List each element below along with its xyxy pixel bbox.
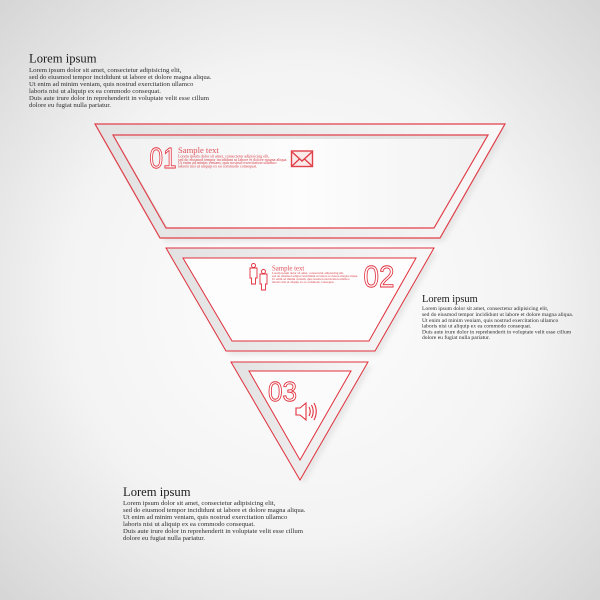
text block: right: sed do eiusmod tempor incididunt ut labore et dolore magna aliqua. [422, 312, 574, 318]
text block: right [422, 294, 574, 341]
text block: right: dolore eu fugiat nulla pariatur. [422, 334, 490, 341]
text block: right: laboris nisi ut aliquip ex ea commodo consequat. [422, 324, 532, 330]
text block: top left [29, 52, 212, 109]
icon: people [250, 264, 267, 290]
sample text 02: Ut enim ad minim veniam, quis nostrud exercitation ullamco [272, 277, 350, 282]
sample text 02 [272, 266, 358, 284]
text block: bottom: Lorem ipsum dolor sit amet, consectetur adipisicing elit, [123, 500, 276, 507]
number 03: 03 [268, 376, 297, 407]
text block: right: Ut enim ad minim veniam, quis nostrud exercitation ullamco [422, 318, 558, 324]
text block: bottom: Lorem ipsum [123, 485, 191, 499]
text block: top left: Lorem ipsum dolor sit amet, consectetur adipisicing elit, [29, 67, 182, 74]
text block: bottom: Ut enim ad minim veniam, quis nostrud exercitation ullamco [123, 514, 288, 521]
text block: right: Duis aute irure dolor in reprehenderit in voluptate velit esse cillum [422, 329, 572, 335]
number 01: 01 [150, 143, 176, 175]
text block: bottom: laboris nisi ut aliquip ex ea commodo consequat. [123, 521, 255, 528]
text block: top left: Lorem ipsum [29, 52, 97, 66]
sample text 02: Lorem ipsum dolor sit amet, consectetur adipisicing elit, [272, 271, 344, 276]
sample text 02: Sample text [272, 266, 304, 272]
sample text 01: Sample text [178, 145, 219, 155]
text block: bottom: dolore eu fugiat nulla pariatur. [123, 535, 205, 542]
panel: triangle 03 [231, 362, 372, 484]
sample text 01: laboris nisi ut aliquip ex ea commodo consequat. [178, 163, 257, 168]
sample text 01: sed do eiusmod tempor incididunt ut labore et dolore magna aliqua. [178, 157, 287, 162]
text block: top left: Duis aute irure dolor in reprehenderit in voluptate velit esse cillum [29, 95, 210, 102]
icon: envelope [292, 151, 312, 166]
text block: bottom: Duis aute irure dolor in reprehenderit in voluptate velit esse cillum [123, 528, 304, 535]
text block: top left: sed do eiusmod tempor incididunt ut labore et dolore magna aliqua. [29, 74, 212, 81]
text block: top left: Ut enim ad minim veniam, quis nostrud exercitation ullamco [29, 81, 194, 88]
sample text 01 [178, 145, 287, 168]
text block: bottom [123, 485, 306, 542]
number 02: 02 [364, 259, 394, 294]
text block: top left: dolore eu fugiat nulla pariatur. [29, 102, 111, 109]
text block: right: Lorem ipsum dolor sit amet, consectetur adipisicing elit, [422, 306, 549, 312]
icon: speaker [296, 403, 316, 420]
text block: bottom: sed do eiusmod tempor incididunt ut labore et dolore magna aliqua. [123, 507, 306, 514]
text block: top left: laboris nisi ut aliquip ex ea commodo consequat. [29, 88, 161, 95]
panel: trapezoid 01 [95, 124, 509, 242]
sample text 01: Lorem ipsum dolor sit amet, consectetur adipisicing elit, [178, 154, 269, 160]
sample text 02: laboris nisi ut aliquip ex ea commodo consequat. [272, 280, 335, 284]
sample text 01: Ut enim ad minim veniam, quis nostrud exercitation ullamco [178, 160, 277, 166]
sample text 02: sed do eiusmod tempor incididunt ut labore et dolore magna aliqua. [272, 274, 358, 278]
panel: trapezoid 02 [166, 248, 438, 355]
text block: right: Lorem ipsum [422, 294, 478, 305]
